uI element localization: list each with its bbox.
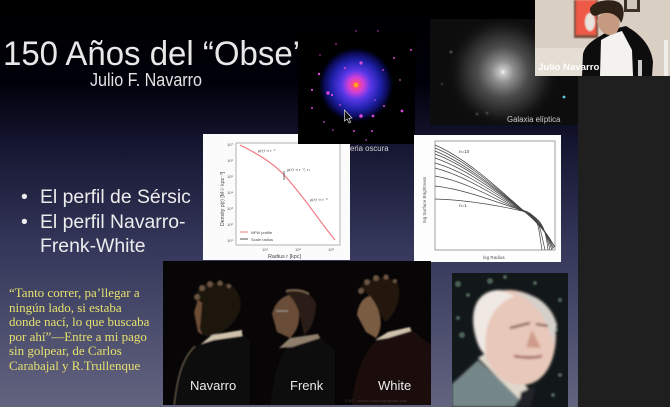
name labels: White (378, 378, 411, 393)
Sersic profile chart: log Surface Brightness (422, 176, 427, 223)
right dark video panel (578, 76, 670, 407)
Sersic profile chart: log Radius (483, 255, 505, 260)
bullet list: • (21, 186, 28, 208)
NFW density profile chart: 10² (227, 222, 233, 227)
small wall frame (624, 0, 640, 12)
caption: galaxia eliptica: Galaxia elíptica (507, 115, 561, 124)
Sersic profile chart (414, 135, 561, 262)
portrait: Frenk (271, 288, 321, 349)
NFW density profile chart: 10³ (328, 247, 334, 252)
wall poster (574, 0, 598, 38)
quote (9, 285, 150, 373)
NFW density profile chart: 10⁴ (227, 190, 233, 195)
photo: Navarro, Frenk, White: © BT - resusc.color.wordpress.com (345, 398, 408, 403)
cursor arrow (344, 110, 352, 123)
photo: Navarro, Frenk, White (163, 261, 431, 405)
portrait: Navarro (174, 280, 250, 405)
quote: sin golpear, de Carlos (9, 343, 122, 358)
quote: ningún lado, si estaba (9, 300, 122, 315)
author subtitle: Julio F. Navarro (90, 70, 202, 90)
name labels: Frenk (290, 378, 324, 393)
elliptical galaxy image (430, 16, 578, 128)
NFW density profile chart: Radius r [kpc] (268, 254, 301, 260)
NFW density profile chart: 10² (295, 247, 301, 252)
bullet list: El perfil Navarro- (40, 211, 185, 233)
NFW density profile chart: 10⁵ (227, 174, 233, 179)
photo: Sersic portrait (452, 273, 568, 407)
NFW density profile chart: 10¹ (262, 247, 268, 252)
bullet list: • (21, 211, 28, 233)
Sersic profile chart: n=1 (459, 203, 467, 208)
name labels: Navarro (190, 378, 236, 393)
caption: materia oscura: eria oscura (350, 144, 389, 153)
Sersic profile chart: n=10 (459, 149, 470, 154)
bullet list: Frenk-White (40, 235, 146, 257)
bullet list (21, 186, 191, 257)
NFW density profile chart (203, 134, 350, 260)
portrait: White (352, 274, 431, 405)
NFW density profile chart: ρ(r) ∝ r⁻², rₛ (286, 167, 310, 173)
quote: Carabajal y R.Trullenque (9, 358, 141, 373)
quote: donde nací, lo que buscaba (9, 314, 150, 329)
quote: “Tanto correr, pa’llegar a (9, 285, 140, 300)
webcam video: Julio Navarro (535, 0, 670, 76)
NFW density profile chart: ρ(r) ∝ r⁻¹ (257, 148, 276, 153)
NFW density profile chart: ρ(r) ∝ r⁻³ (309, 197, 328, 202)
name tag: Julio Navarro (538, 62, 599, 73)
title: 150 Años del “Obse’ (3, 35, 300, 73)
bullet list: El perfil de Sérsic (40, 186, 191, 208)
NFW density profile chart: 10³ (227, 206, 233, 211)
NFW density profile chart: 10⁷ (227, 142, 233, 147)
NFW density profile chart: 10¹ (227, 238, 233, 243)
dark matter halo image (298, 30, 415, 144)
NFW density profile chart: Density ρ(r) [M☉ kpc⁻³] (220, 171, 226, 226)
NFW density profile chart: 10⁶ (227, 158, 233, 163)
quote: por ahí”—Entre a mi pago (9, 329, 147, 344)
NFW density profile chart: Scale radius (251, 237, 273, 242)
presenter (582, 0, 653, 76)
NFW density profile chart: NFW profile (251, 230, 273, 235)
name labels (191, 380, 411, 390)
